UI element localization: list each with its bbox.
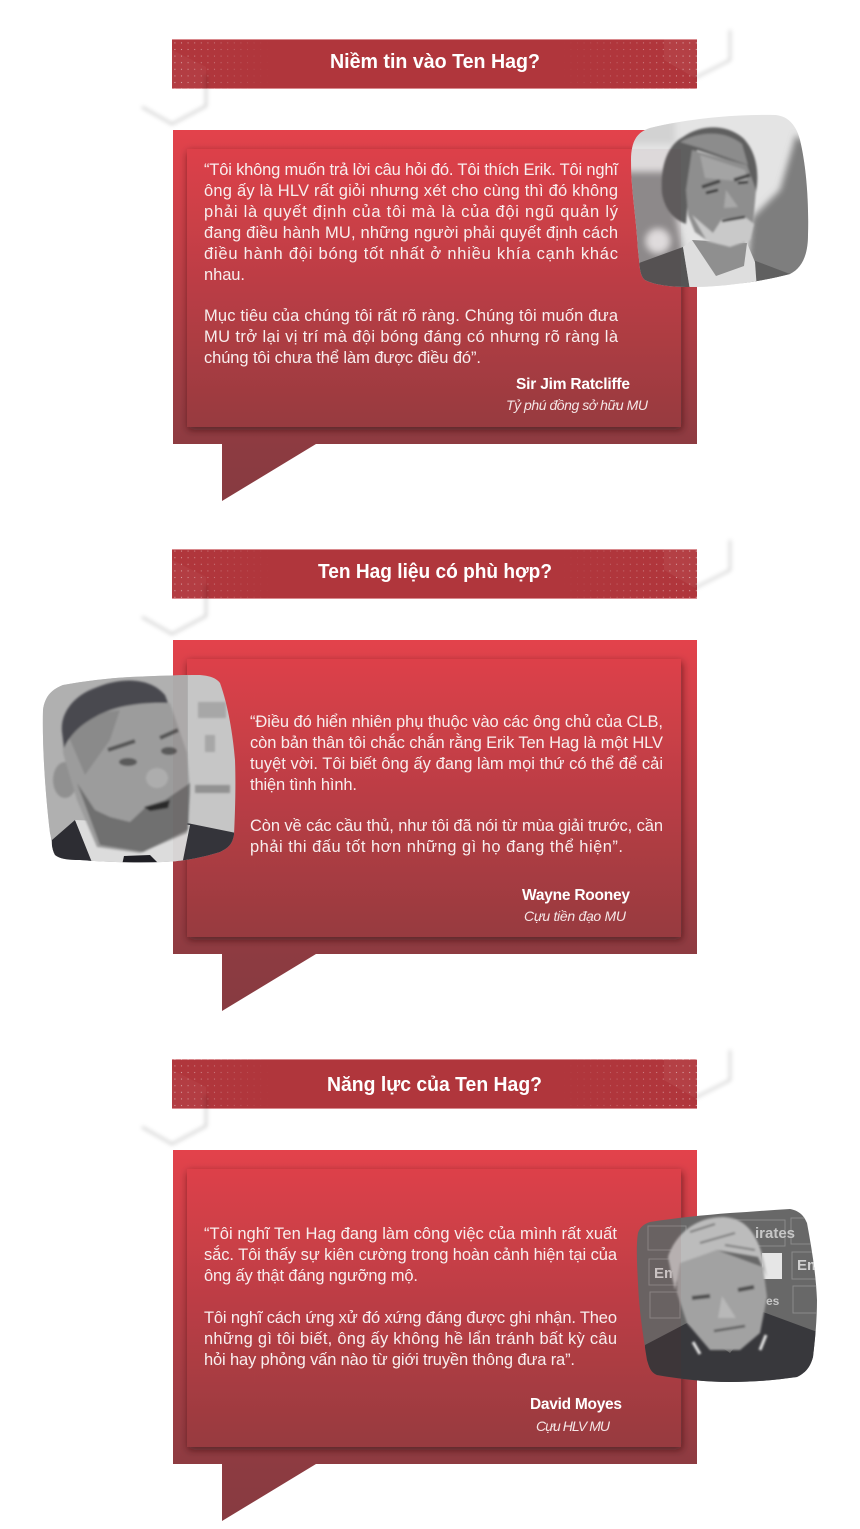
speech bubble 3 bbox=[173, 1150, 697, 1521]
photo: David Moyes bbox=[636, 1209, 817, 1382]
heading banner 3: Năng lực của Ten Hag? bbox=[327, 1074, 542, 1096]
section 3: Năng lực của Ten Hag? bbox=[140, 1026, 823, 1521]
attribution 3: Cựu HLV MU bbox=[536, 1418, 611, 1434]
quote text 1: “Tôi không muốn trả lời câu hỏi đó. Tôi thích Erik. Tôi nghĩ bbox=[204, 161, 619, 179]
heading banner 2 bbox=[140, 516, 730, 634]
attribution 1: Tỷ phú đồng sở hữu MU bbox=[506, 397, 649, 413]
heading banner 2: Ten Hag liệu có phù hợp? bbox=[318, 561, 552, 583]
quote text 3: những gì tôi biết, ông ấy không hề lẩn tránh bất kỳ câu bbox=[204, 1330, 617, 1348]
quote card 1 bbox=[187, 149, 681, 427]
quote text 2: “Điều đó hiển nhiên phụ thuộc vào các ông chủ của CLB, bbox=[250, 713, 663, 731]
speech bubble 1 bbox=[173, 130, 697, 501]
quote text 1: ông ấy là HLV rất giỏi nhưng xét cho cùng thì đó không bbox=[204, 182, 618, 200]
quote text 1: phải là quyết định của tôi mà là của đội ngũ quản lý bbox=[204, 203, 619, 221]
quote text 1: Mục tiêu của chúng tôi rất rõ ràng. Chúng tôi muốn đưa bbox=[204, 307, 619, 325]
quote text 1: điều hành đội bóng tốt nhất ở nhiều khía cạnh khác bbox=[204, 245, 618, 263]
speech bubble 2 bbox=[173, 640, 697, 1011]
photo: David Moyes: Em bbox=[797, 1257, 820, 1274]
quote text 1 bbox=[204, 161, 619, 367]
quote text 3: sắc. Tôi thấy sự kiên cường trong hoàn cảnh hiện tại của bbox=[204, 1245, 618, 1264]
heading banner 3 bbox=[140, 1026, 730, 1144]
photo: David Moyes: irates bbox=[755, 1225, 795, 1242]
quote text 2: còn bản thân tôi chắc chắn rằng Erik Ten Hag là một HLV bbox=[250, 733, 663, 752]
attribution 2 bbox=[522, 887, 630, 924]
quote text 2: phải thi đấu tốt hơn những gì họ đang thể hiện”. bbox=[250, 838, 623, 856]
section 1: Niềm tin vào Ten Hag? bbox=[140, 6, 815, 501]
attribution 3: David Moyes bbox=[530, 1396, 622, 1413]
quote text 3: ông ấy thật đáng ngưỡng mộ. bbox=[204, 1267, 418, 1285]
attribution 2: Wayne Rooney bbox=[522, 887, 630, 904]
heading banner 1 bbox=[140, 6, 730, 124]
attribution 2: Cựu tiền đạo MU bbox=[524, 908, 627, 924]
quote text 3: hỏi hay phỏng vấn nào từ giới truyền thông đưa ra”. bbox=[204, 1351, 575, 1369]
attribution 1: Sir Jim Ratcliffe bbox=[516, 376, 630, 393]
quote text 2: tuyệt vời. Tôi biết ông ấy đang làm mọi thứ có thể để cải bbox=[250, 755, 663, 773]
heading banner 1: Niềm tin vào Ten Hag? bbox=[330, 51, 540, 73]
quote text 1: nhau. bbox=[204, 266, 245, 284]
quote text 3: Tôi nghĩ cách ứng xử đó xứng đáng được ghi nhận. Theo bbox=[204, 1309, 617, 1327]
quote text 3: “Tôi nghĩ Ten Hag đang làm công việc của mình rất xuất bbox=[204, 1225, 617, 1243]
section 2: Ten Hag liệu có phù hợp? bbox=[38, 516, 730, 1011]
quote card 3 bbox=[187, 1169, 681, 1447]
quote text 2 bbox=[250, 713, 663, 856]
quote text 1: đang điều hành MU, những người phải quyết định cách bbox=[204, 224, 618, 242]
attribution 1 bbox=[506, 376, 649, 413]
photo: Sir Jim Ratcliffe bbox=[631, 115, 808, 287]
quote text 1: MU trở lại vị trí mà đội bóng đáng có nhưng rõ ràng là bbox=[204, 328, 619, 346]
quote card 2 bbox=[187, 659, 681, 937]
quote text 2: thiện tình hình. bbox=[250, 776, 357, 794]
quote text 2: Còn về các cầu thủ, như tôi đã nói từ mùa giải trước, cần bbox=[250, 817, 663, 835]
quote text 3 bbox=[204, 1225, 618, 1369]
attribution 3 bbox=[530, 1396, 622, 1434]
photo: David Moyes: es bbox=[766, 1294, 780, 1308]
photo: David Moyes: Em bbox=[654, 1265, 677, 1282]
quote text 1: chúng tôi chưa thể làm được điều đó”. bbox=[204, 349, 481, 367]
photo: Wayne Rooney bbox=[42, 675, 236, 862]
